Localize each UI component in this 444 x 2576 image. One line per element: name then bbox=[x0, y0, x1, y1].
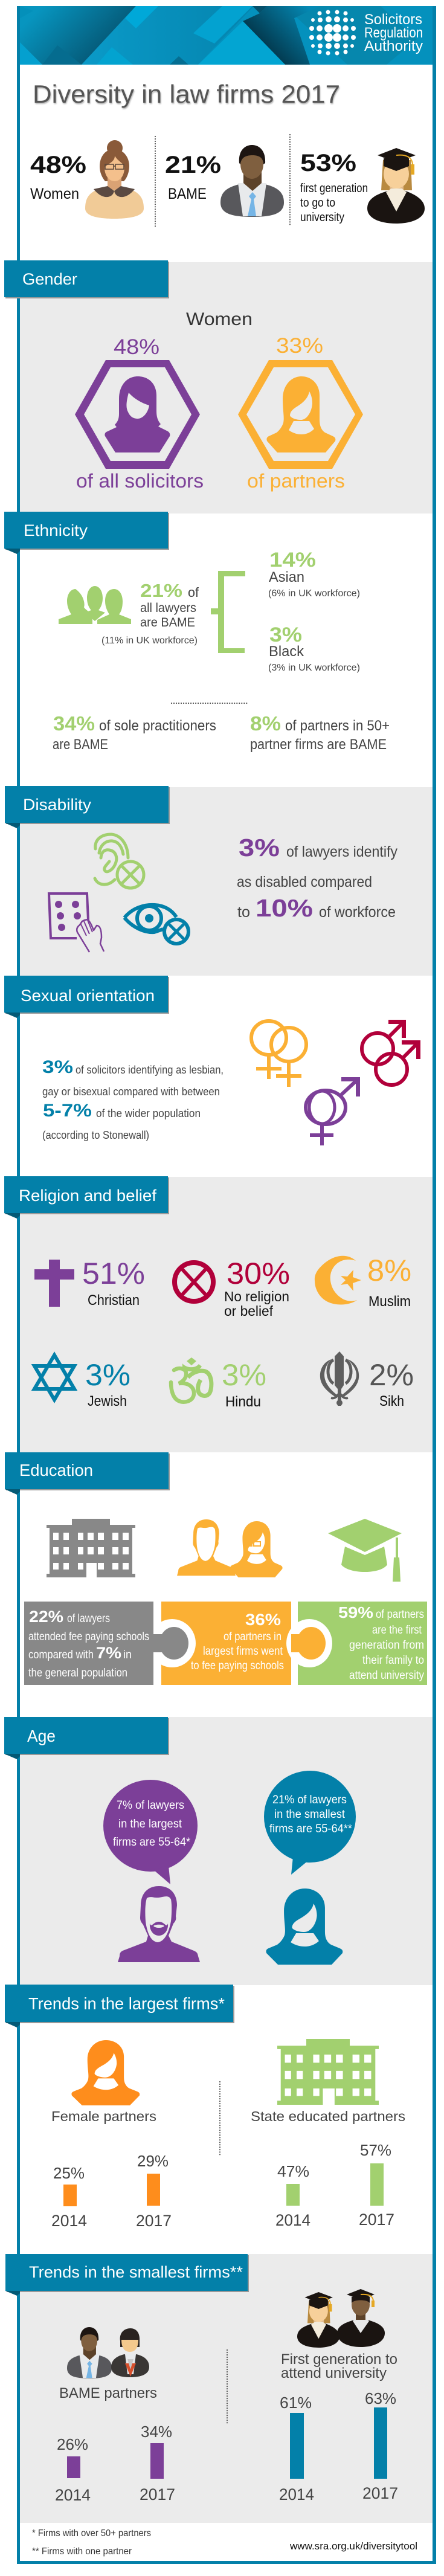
panel: ethnicity: of partners in 50+ bbox=[285, 718, 390, 734]
icon: school building bbox=[47, 1519, 135, 1577]
panel: ethnicity: 34% bbox=[53, 712, 95, 735]
panel: religion content: No religion bbox=[224, 1289, 289, 1304]
speech bubble: largest firms bbox=[103, 1780, 198, 1884]
panel: religion content: 30% bbox=[227, 1257, 290, 1290]
heading: Trends in the largest firms: Trends in the largest firms* bbox=[28, 1994, 225, 2013]
divider bbox=[227, 2350, 228, 2425]
panel: ethnicity: partner firms are BAME bbox=[250, 736, 387, 753]
heading: Gender: Gender bbox=[22, 270, 77, 288]
bracket bbox=[211, 571, 245, 653]
puzzle piece: 22% grey: 7% bbox=[96, 1644, 121, 1662]
heading: Disability bbox=[5, 786, 170, 828]
divider bbox=[289, 135, 291, 225]
panel: ethnicity: (11% in UK workforce) bbox=[101, 636, 198, 646]
chart: state educated partners bbox=[251, 2039, 405, 2229]
stat: first generation: university bbox=[300, 211, 344, 224]
panel: sexual orientation: 5-7% bbox=[43, 1101, 92, 1121]
icon: orange hexagon woman bbox=[238, 360, 363, 469]
heading: Religion and belief bbox=[4, 1176, 169, 1219]
puzzle piece: 36% orange: 36% bbox=[245, 1611, 281, 1629]
panel: religion content: 3% bbox=[222, 1358, 266, 1392]
speech bubble: smallest firms: firms are 55-64** bbox=[269, 1823, 353, 1835]
logo: Solicitors Regulation Authority: Authority bbox=[364, 38, 423, 54]
divider bbox=[219, 2082, 220, 2156]
panel: ethnicity: all lawyers bbox=[140, 601, 196, 615]
panel: age content bbox=[103, 1771, 356, 1965]
panel: ethnicity: of bbox=[188, 585, 199, 600]
stat: BAME: 21% bbox=[165, 152, 221, 178]
puzzle piece: 59% green: of partners bbox=[376, 1608, 424, 1621]
title: Diversity in law firms 2017 bbox=[33, 80, 340, 108]
puzzle piece: 22% grey: the general population bbox=[28, 1667, 127, 1679]
panel: religion content: Muslim bbox=[368, 1293, 411, 1310]
panel: disability content: 3% bbox=[239, 834, 280, 861]
panel: gender content: 33% bbox=[276, 334, 323, 358]
panel: education bbox=[24, 1519, 427, 1685]
stat: women: 48% bbox=[30, 152, 86, 178]
chart: first generation to attend university: 2014 bbox=[279, 2485, 314, 2504]
icon: lesbian symbol bbox=[251, 1021, 306, 1087]
icon: man in suit bbox=[220, 145, 284, 217]
panel: gender background bbox=[20, 262, 433, 514]
puzzle piece: 36% orange: largest firms went bbox=[203, 1645, 283, 1658]
puzzle piece: 36% orange: to fee paying schools bbox=[191, 1660, 284, 1672]
panel: ethnicity: are BAME bbox=[53, 736, 108, 753]
icon: gay male symbol bbox=[362, 1020, 420, 1085]
speech bubble: largest firms: 7% of lawyers bbox=[117, 1799, 184, 1812]
chart: female partners: 29% bbox=[137, 2152, 169, 2170]
heading: Ethnicity bbox=[4, 512, 169, 554]
icon: bearded man bbox=[118, 1886, 200, 1962]
stat: BAME: BAME bbox=[168, 185, 207, 202]
stat: first generation bbox=[300, 148, 425, 224]
panel: gender content: Women bbox=[186, 309, 253, 329]
puzzle piece: 59% green: 59% bbox=[338, 1603, 373, 1621]
chart: first generation to attend university: 61% bbox=[280, 2394, 312, 2412]
speech bubble: smallest firms: in the smallest bbox=[274, 1808, 346, 1821]
panel: age background bbox=[20, 1717, 433, 1985]
chart: female partners: Female partners bbox=[51, 2108, 156, 2124]
panel: sexual orientation: gay or bisexual compared with between bbox=[42, 1086, 220, 1098]
panel: sexual orientation bbox=[42, 1020, 420, 1145]
panel: religion content: Jewish bbox=[88, 1393, 127, 1409]
puzzle piece: 36% orange bbox=[149, 1602, 291, 1685]
chart: BAME partners: 26% bbox=[57, 2435, 88, 2453]
panel: gender content: of partners bbox=[247, 470, 345, 492]
icon: crescent and star bbox=[315, 1256, 361, 1304]
panel: gender content: of all solicitors bbox=[76, 470, 204, 492]
panel: disability content: 10% bbox=[256, 894, 313, 922]
heading: Education: Education bbox=[19, 1461, 93, 1480]
puzzle piece: 59% green bbox=[286, 1602, 427, 1685]
heading: Ethnicity: Ethnicity bbox=[24, 521, 88, 539]
panel: smallest firms background bbox=[20, 2254, 433, 2523]
puzzle piece: 59% green: attend university bbox=[349, 1669, 424, 1682]
heading: Gender bbox=[4, 260, 169, 298]
stat: women: Women bbox=[30, 185, 79, 202]
panel: religion content: Hindu bbox=[225, 1394, 261, 1410]
panel: ethnicity: Black bbox=[269, 643, 304, 660]
stat: first generation: 53% bbox=[300, 150, 356, 176]
panel: religion content: Sikh bbox=[379, 1393, 404, 1409]
panel: ethnicity: (6% in UK workforce) bbox=[268, 588, 360, 599]
panel: disability content bbox=[49, 834, 397, 952]
panel: disability content: of lawyers identify bbox=[286, 843, 397, 860]
icon: graduate bbox=[367, 148, 425, 224]
panel: religion content: 3% bbox=[85, 1358, 130, 1392]
icon: green building bbox=[277, 2039, 379, 2105]
chart: state educated partners: 2014 bbox=[275, 2211, 310, 2229]
chart: BAME partners: 2017 bbox=[140, 2485, 175, 2504]
panel: disability content: as disabled compared bbox=[237, 874, 372, 890]
stat: BAME bbox=[165, 145, 284, 217]
panel: gender content bbox=[75, 309, 363, 492]
icon: woman bbox=[266, 1889, 343, 1965]
speech bubble: smallest firms: 21% of lawyers bbox=[272, 1794, 347, 1806]
panel: religion background bbox=[20, 1177, 433, 1452]
icon: eye crossed bbox=[124, 905, 188, 944]
divider bbox=[155, 137, 156, 227]
icon: khanda bbox=[320, 1351, 359, 1406]
puzzle piece: 59% green: are the first bbox=[372, 1624, 422, 1637]
website link: www.sra.org.uk/diversitytool bbox=[289, 2540, 417, 2552]
puzzle piece: 22% grey bbox=[24, 1602, 188, 1685]
panel: ethnicity: (3% in UK workforce) bbox=[268, 663, 360, 673]
icon: no religion bbox=[175, 1263, 213, 1301]
icon: man and woman in suits bbox=[67, 2327, 149, 2378]
panel: ethnicity: of sole practitioners bbox=[99, 718, 216, 734]
footnotes bbox=[32, 2528, 151, 2557]
panel: sexual orientation: (according to Stonewall) bbox=[42, 1129, 149, 1141]
icon: orange woman bbox=[71, 2040, 140, 2105]
puzzle piece: 59% green: generation from bbox=[349, 1639, 424, 1652]
speech bubble: smallest firms bbox=[264, 1771, 356, 1875]
panel: ethnicity: 8% bbox=[250, 712, 281, 735]
banner bbox=[20, 6, 433, 65]
panel: sexual orientation: of solicitors identifying as lesbian, bbox=[76, 1064, 224, 1076]
icon: woman with glasses bbox=[85, 140, 144, 219]
chart: first generation to attend university: 63% bbox=[365, 2389, 396, 2407]
panel: ethnicity: are BAME bbox=[140, 616, 195, 630]
chart: state educated partners: 2017 bbox=[359, 2211, 394, 2229]
chart: first generation to attend university: 2017 bbox=[362, 2484, 398, 2502]
chart: first generation to attend university: First generation to bbox=[281, 2351, 397, 2368]
icon: bisexual symbol bbox=[306, 1077, 360, 1145]
chart: BAME partners: 34% bbox=[141, 2423, 172, 2441]
panel: ethnicity: Asian bbox=[269, 569, 304, 585]
heading: Sexual orientation: Sexual orientation bbox=[21, 987, 155, 1005]
logo: Solicitors Regulation Authority: Regulation bbox=[364, 25, 423, 41]
icon: star of David bbox=[34, 1355, 74, 1400]
panel: religion content: Christian bbox=[88, 1292, 140, 1309]
panel: ethnicity bbox=[53, 549, 390, 753]
speech bubble: largest firms: in the largest bbox=[118, 1818, 182, 1831]
heading: Sexual orientation bbox=[4, 976, 169, 1018]
logo: Solicitors Regulation Authority bbox=[309, 10, 423, 56]
chart: first generation to attend university: attend university bbox=[281, 2365, 387, 2381]
panel: gender content: 48% bbox=[114, 335, 159, 359]
icon: mortarboard bbox=[328, 1519, 402, 1582]
heading: Trends in the largest firms bbox=[5, 1985, 234, 2027]
icon: braille and hand bbox=[49, 894, 104, 952]
heading: Education bbox=[5, 1452, 170, 1495]
panel: ethnicity: 14% bbox=[269, 549, 316, 572]
panel: sexual orientation: of the wider population bbox=[96, 1107, 201, 1119]
icon: man and woman bbox=[177, 1519, 283, 1577]
panel: religion content: 8% bbox=[367, 1254, 411, 1287]
chart: state educated partners: State educated partners bbox=[251, 2108, 405, 2124]
icon: purple hexagon woman bbox=[75, 360, 200, 469]
speech bubble: largest firms: firms are 55-64* bbox=[113, 1836, 191, 1849]
chart: BAME partners: 2014 bbox=[55, 2486, 91, 2504]
stat: first generation: to go to bbox=[300, 196, 335, 210]
logo: Solicitors Regulation Authority: Solicitors bbox=[364, 11, 422, 28]
panel: religion content: or belief bbox=[224, 1303, 274, 1319]
icon: om bbox=[171, 1357, 211, 1402]
heading: Trends in the smallest firms bbox=[5, 2254, 249, 2296]
puzzle piece: 22% grey: 22% bbox=[29, 1608, 63, 1626]
icon: two graduates bbox=[297, 2289, 385, 2348]
heading: Disability: Disability bbox=[23, 796, 92, 814]
chart: female partners bbox=[51, 2040, 172, 2230]
puzzle piece: 22% grey: attended fee paying schools bbox=[28, 1631, 149, 1643]
chart: BAME partners: BAME partners bbox=[59, 2385, 157, 2401]
footnotes: ** Firms with one partner bbox=[32, 2546, 132, 2557]
chart: female partners: 2014 bbox=[51, 2212, 87, 2230]
footnotes: * Firms with over 50+ partners bbox=[32, 2528, 151, 2539]
panel: religion content bbox=[34, 1254, 414, 1410]
heading: Religion and belief: Religion and belief bbox=[19, 1187, 156, 1205]
chart: state educated partners: 47% bbox=[277, 2162, 309, 2180]
puzzle piece: 22% grey: in bbox=[123, 1649, 132, 1661]
puzzle piece: 36% orange: of partners in bbox=[224, 1631, 282, 1643]
chart: BAME partners bbox=[55, 2327, 175, 2504]
puzzle piece: 22% grey: of lawyers bbox=[67, 1612, 110, 1625]
panel: ethnicity: 21% bbox=[140, 580, 182, 601]
chart: first generation to attend university bbox=[279, 2289, 398, 2504]
puzzle piece: 59% green: their family to bbox=[362, 1654, 424, 1667]
icon: ear crossed bbox=[95, 834, 144, 888]
icon: cross bbox=[34, 1260, 74, 1307]
panel: ethnicity: 3% bbox=[269, 623, 302, 646]
panel: disability background bbox=[20, 787, 433, 976]
puzzle piece: 22% grey: compared with bbox=[28, 1649, 94, 1661]
heading: Age bbox=[4, 1717, 169, 1759]
chart: state educated partners: 57% bbox=[360, 2141, 391, 2159]
stat: women bbox=[30, 140, 144, 219]
panel: sexual orientation: 3% bbox=[42, 1057, 73, 1077]
stat: first generation: first generation bbox=[300, 182, 368, 195]
panel: disability content: of workforce bbox=[319, 904, 396, 921]
heading: Age: Age bbox=[27, 1727, 56, 1745]
icon: three people bbox=[59, 586, 131, 624]
panel: disability content: to bbox=[237, 904, 250, 921]
heading: Trends in the smallest firms: Trends in the smallest firms** bbox=[29, 2263, 243, 2281]
panel: religion content: 2% bbox=[369, 1358, 414, 1392]
chart: female partners: 2017 bbox=[136, 2212, 172, 2230]
panel: religion content: 51% bbox=[82, 1257, 145, 1290]
chart: female partners: 25% bbox=[53, 2164, 85, 2182]
